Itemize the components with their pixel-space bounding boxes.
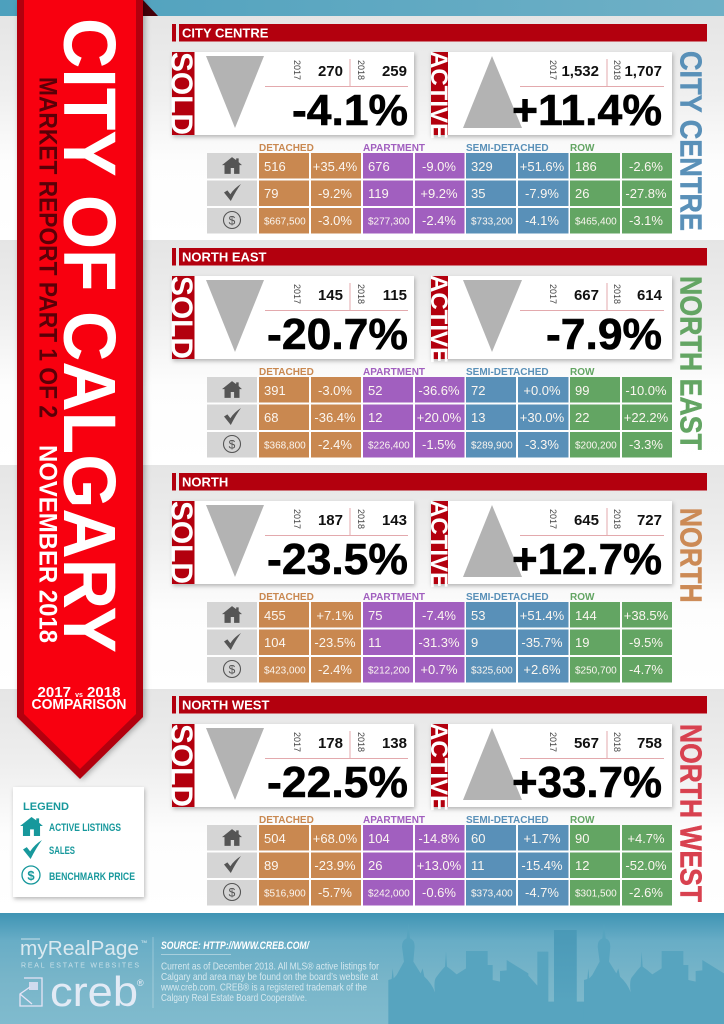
top teal band xyxy=(0,0,724,16)
benchmark price row: $250,700 xyxy=(575,666,617,676)
listings row: +4.7% xyxy=(627,831,665,846)
listings row: 144 xyxy=(575,608,597,623)
panel: active xyxy=(425,275,672,363)
benchmark price row: +0.7% xyxy=(420,662,458,677)
sales row: 79 xyxy=(264,186,278,201)
2017 active xyxy=(548,60,599,80)
benchmark price row xyxy=(264,437,663,452)
panel: active xyxy=(425,500,672,588)
disclaimer: Calgary and area may be found on the board’s website at xyxy=(161,971,378,983)
sales row: 11 xyxy=(368,635,382,650)
listings row: 60 xyxy=(471,831,485,846)
column headings xyxy=(259,367,595,378)
icon: dollar: $ xyxy=(229,438,236,452)
column headings: APARTMENT xyxy=(363,592,425,603)
2017 sold xyxy=(292,509,343,529)
sales row: 9 xyxy=(471,635,478,650)
sold change: -23.5% xyxy=(267,535,408,584)
sales row: 11 xyxy=(471,858,484,873)
listings row xyxy=(264,608,669,623)
2017 active: 2017 xyxy=(548,732,558,752)
benchmark price row: -2.4% xyxy=(422,213,456,228)
logo: myRealPage: myRealPage xyxy=(20,938,139,960)
panel: sold xyxy=(164,276,414,359)
section: north xyxy=(164,473,708,682)
icon: dollar: $ xyxy=(229,662,236,676)
section header xyxy=(172,24,707,42)
sales row: +22.2% xyxy=(624,410,669,425)
benchmark price row: +2.6% xyxy=(523,662,561,677)
disclaimer: Current as of December 2018. All MLS® active listings for xyxy=(161,960,379,972)
benchmark price row: -4.1% xyxy=(525,213,559,228)
sold strip: SOLD xyxy=(164,724,200,807)
icon: dollar: $ xyxy=(229,214,236,228)
up arrow xyxy=(463,505,522,577)
active change: +12.7% xyxy=(512,535,662,584)
main title: CITY OF CALGARY xyxy=(48,18,131,653)
benchmark price row: $242,000 xyxy=(368,888,410,900)
sales row: 19 xyxy=(575,635,589,650)
column headings: SEMI-DETACHED xyxy=(466,367,549,378)
listings row: 516 xyxy=(264,159,286,174)
2018 sold: 143 xyxy=(382,512,407,529)
sales row xyxy=(264,186,667,201)
2018 active: 2018 xyxy=(612,60,622,80)
legend xyxy=(13,787,144,897)
column headings: APARTMENT xyxy=(363,143,425,154)
benchmark price row: -4.7% xyxy=(525,885,559,900)
sold strip: SOLD xyxy=(164,276,200,359)
section header xyxy=(172,696,707,714)
icon: check xyxy=(224,633,241,650)
benchmark price row: $212,200 xyxy=(368,666,410,676)
2018 active: 1,707 xyxy=(624,63,662,80)
red ribbon xyxy=(17,0,158,779)
icon: house xyxy=(222,606,242,623)
2017 sold: 2017 xyxy=(292,284,302,304)
2017 sold: 2017 xyxy=(292,509,302,529)
benchmark price row: $368,800 xyxy=(264,440,306,452)
benchmark price row: -0.6% xyxy=(422,885,456,900)
2017 active: 2017 xyxy=(548,509,558,529)
active strip: ACTIVE xyxy=(425,723,452,811)
section header: NORTH WEST xyxy=(182,698,269,712)
sales row: -9.5% xyxy=(629,635,663,650)
active strip: ACTIVE xyxy=(425,275,452,363)
sales row: 26 xyxy=(575,186,589,201)
sales row: -27.8% xyxy=(625,186,667,201)
listings row: +51.6% xyxy=(520,159,565,174)
down arrow xyxy=(206,56,264,128)
sold change: -4.1% xyxy=(292,86,408,135)
benchmark price row: $277,300 xyxy=(368,216,410,228)
section header xyxy=(172,473,707,490)
2018 sold: 2018 xyxy=(356,60,366,80)
2018 sold: 115 xyxy=(383,287,407,304)
benchmark price row: $516,900 xyxy=(264,888,306,900)
listings row: 72 xyxy=(471,383,485,398)
icon: benchmark price: $ xyxy=(27,868,35,883)
column headings: SEMI-DETACHED xyxy=(466,592,549,603)
listings row: 52 xyxy=(368,383,382,398)
listings row: 99 xyxy=(575,383,589,398)
listings row: +35.4% xyxy=(313,159,358,174)
2017 active: 2017 xyxy=(548,60,558,80)
icon: house xyxy=(222,157,242,174)
sales row: 68 xyxy=(264,410,278,425)
listings row: -36.6% xyxy=(418,383,460,398)
sales row: 119 xyxy=(368,186,389,201)
sales row: -36.4% xyxy=(314,410,356,425)
2017 active: 1,532 xyxy=(561,63,599,80)
2018 active: 727 xyxy=(637,512,662,529)
benchmark price row: $200,200 xyxy=(575,440,617,452)
sold strip: SOLD xyxy=(164,52,200,135)
sold change: -22.5% xyxy=(267,758,408,807)
dividers xyxy=(520,731,664,758)
2018 active: 614 xyxy=(637,287,663,304)
comparison label: 2017 vs 2018 xyxy=(38,684,120,701)
2018 sold xyxy=(356,732,407,752)
sales row xyxy=(264,635,663,650)
column headings: SEMI-DETACHED xyxy=(466,815,549,826)
sales row: +9.2% xyxy=(420,186,458,201)
logo: myRealPage xyxy=(20,938,147,970)
column headings: SEMI-DETACHED xyxy=(466,143,549,154)
property type table xyxy=(207,592,672,682)
2018 active: 2018 xyxy=(612,732,622,752)
column headings: ROW xyxy=(570,367,595,378)
panel: sold xyxy=(164,724,414,807)
creb icon xyxy=(20,978,42,1006)
footer xyxy=(0,913,724,1024)
benchmark price row: -3.3% xyxy=(629,437,663,452)
2017 sold: 178 xyxy=(318,735,343,752)
report date: NOVEMBER 2018 xyxy=(34,445,62,643)
icon: dollar xyxy=(224,436,240,452)
listings row: +51.4% xyxy=(520,608,565,623)
icon: check xyxy=(224,856,241,873)
2018 sold xyxy=(356,284,407,304)
column headings xyxy=(259,143,595,154)
sales row: 89 xyxy=(264,858,278,873)
2017 active: 2017 xyxy=(548,284,558,304)
panel: active xyxy=(425,723,672,811)
2017 sold: 187 xyxy=(318,512,343,529)
label: sales: SALES xyxy=(49,845,75,857)
2018 sold: 138 xyxy=(382,735,407,752)
side label: NORTH EAST xyxy=(674,276,708,450)
listings row: 90 xyxy=(575,831,589,846)
sales row: -7.9% xyxy=(525,186,559,201)
logo: creb xyxy=(20,968,144,1015)
column headings: DETACHED xyxy=(259,367,314,378)
property type table xyxy=(207,815,672,906)
section header: NORTH EAST xyxy=(182,250,267,264)
logo: creb: ® xyxy=(137,978,144,988)
icon: dollar xyxy=(224,212,240,228)
benchmark price row: $301,500 xyxy=(575,888,617,900)
sales row: 26 xyxy=(368,858,382,873)
side label: CITY CENTRE xyxy=(674,51,708,231)
column headings xyxy=(259,592,595,603)
2018 active xyxy=(612,60,662,80)
benchmark price row: $373,400 xyxy=(471,888,513,900)
section: city centre xyxy=(164,24,708,234)
down arrow xyxy=(463,280,522,352)
logo: myRealPage: REAL ESTATE WEBSITES xyxy=(21,962,139,970)
benchmark price row: -3.3% xyxy=(525,437,559,452)
icon: house xyxy=(222,829,242,846)
sales row: -15.4% xyxy=(521,858,563,873)
section: north west xyxy=(164,696,708,906)
side label: NORTH xyxy=(674,508,708,603)
ribbon inner xyxy=(24,0,136,769)
benchmark price row xyxy=(264,885,663,900)
benchmark price row: -1.5% xyxy=(422,437,456,452)
section header: CITY CENTRE xyxy=(182,26,269,40)
panel: sold xyxy=(164,501,414,584)
disclaimer: www.creb.com. CREB® is a registered trademark of the xyxy=(160,982,367,994)
icon: check xyxy=(224,408,241,425)
2017 sold xyxy=(292,284,343,304)
dividers xyxy=(520,283,664,310)
column headings: APARTMENT xyxy=(363,815,425,826)
benchmark price row: $325,600 xyxy=(471,666,513,676)
dividers xyxy=(265,59,408,86)
sales row: +30.0% xyxy=(520,410,565,425)
benchmark price row: -3.0% xyxy=(318,213,352,228)
2017 active: 645 xyxy=(574,512,599,529)
dividers xyxy=(520,59,664,86)
sales row: -31.3% xyxy=(418,635,460,650)
2018 active xyxy=(612,284,663,304)
benchmark price row xyxy=(264,213,663,228)
listings row: 504 xyxy=(264,831,286,846)
active strip: ACTIVE xyxy=(425,51,452,139)
sales row: 22 xyxy=(575,410,589,425)
listings row: +68.0% xyxy=(313,831,358,846)
listings row: 455 xyxy=(264,608,286,623)
benchmark price row: $423,000 xyxy=(264,666,306,676)
icon: sales xyxy=(23,840,42,859)
legend title: LEGEND xyxy=(23,801,69,813)
column headings: DETACHED xyxy=(259,592,314,603)
2018 sold: 2018 xyxy=(356,732,366,752)
listings row: +1.7% xyxy=(523,831,561,846)
panel: active xyxy=(425,51,672,139)
listings row: 186 xyxy=(575,159,597,174)
skyline xyxy=(388,923,724,1024)
2017 sold: 2017 xyxy=(292,60,302,80)
column headings: APARTMENT xyxy=(363,367,425,378)
creb wordmark: creb xyxy=(50,968,138,1015)
down arrow xyxy=(206,505,264,577)
sales row: +13.0% xyxy=(417,858,462,873)
label: benchmark price: BENCHMARK PRICE xyxy=(49,871,135,883)
panel: sold xyxy=(164,52,414,135)
2017 active xyxy=(548,284,599,304)
property type table xyxy=(207,367,672,458)
sales row: -35.7% xyxy=(521,635,563,650)
sales row: -52.0% xyxy=(625,858,667,873)
sales row: -9.2% xyxy=(318,186,352,201)
sales row xyxy=(264,410,669,425)
listings row: +0.0% xyxy=(523,383,561,398)
disclaimer xyxy=(160,960,379,1004)
listings row xyxy=(264,831,665,846)
2018 active: 2018 xyxy=(612,284,622,304)
2018 active: 2018 xyxy=(612,509,622,529)
column headings: ROW xyxy=(570,143,595,154)
listings row: 53 xyxy=(471,608,485,623)
sales row: 104 xyxy=(264,635,286,650)
icon: check xyxy=(224,184,241,201)
active change: -7.9% xyxy=(546,310,662,359)
active strip: ACTIVE xyxy=(425,500,452,588)
benchmark price row: $465,400 xyxy=(575,216,617,228)
listings row: -10.0% xyxy=(625,383,667,398)
benchmark price row: $667,500 xyxy=(264,216,306,228)
disclaimer: Calgary Real Estate Board Cooperative. xyxy=(161,992,307,1004)
2018 active xyxy=(612,732,662,752)
benchmark price row: $226,400 xyxy=(368,440,410,452)
2018 sold xyxy=(356,60,407,80)
listings row: 329 xyxy=(471,159,493,174)
column headings: DETACHED xyxy=(259,815,314,826)
sold change: -20.7% xyxy=(267,310,408,359)
2018 active xyxy=(612,509,662,529)
active change: +33.7% xyxy=(512,758,662,807)
listings row: 391 xyxy=(264,383,286,398)
listings row xyxy=(264,383,667,398)
icon: dollar: $ xyxy=(229,886,236,900)
2018 sold xyxy=(356,509,407,529)
dividers xyxy=(265,283,408,310)
sales row: -23.9% xyxy=(314,858,356,873)
column headings xyxy=(259,815,595,826)
sales row: +20.0% xyxy=(417,410,462,425)
column headings: DETACHED xyxy=(259,143,314,154)
benchmark price row: -4.7% xyxy=(629,662,663,677)
2017 sold: 2017 xyxy=(292,732,302,752)
up arrow xyxy=(463,728,522,800)
icon: active listings xyxy=(20,817,43,836)
sales row: 13 xyxy=(471,410,485,425)
listings row xyxy=(264,159,663,174)
comparison label: COMPARISON xyxy=(32,696,126,713)
ribbon fold xyxy=(143,0,158,16)
property type table xyxy=(207,143,672,234)
column headings: ROW xyxy=(570,592,595,603)
benchmark price row xyxy=(264,662,663,677)
benchmark price row: -2.4% xyxy=(318,437,352,452)
2017 sold: 270 xyxy=(318,63,343,80)
section header: NORTH xyxy=(182,474,228,490)
listings row: -14.8% xyxy=(418,831,460,846)
dividers xyxy=(265,731,408,758)
down arrow xyxy=(206,728,264,800)
sales row: 12 xyxy=(368,410,382,425)
2018 active: 758 xyxy=(637,735,662,752)
2017 active xyxy=(548,509,599,529)
listings row: +7.1% xyxy=(316,608,354,623)
listings row: -3.0% xyxy=(318,383,352,398)
benchmark price row: -3.1% xyxy=(629,213,663,228)
icon: dollar xyxy=(224,884,240,900)
side label: NORTH WEST xyxy=(674,724,708,902)
2017 sold xyxy=(292,60,343,80)
dividers xyxy=(265,508,408,536)
up arrow xyxy=(463,56,522,128)
2018 sold: 2018 xyxy=(356,509,366,529)
2017 sold xyxy=(292,732,343,752)
benchmark price row: $289,900 xyxy=(471,440,513,452)
logo: myRealPage: TM xyxy=(141,939,147,944)
subtitle: MARKET REPORT PART 1 OF 2 xyxy=(34,77,62,418)
listings row: 75 xyxy=(368,608,382,623)
benchmark price row: $733,200 xyxy=(471,216,513,228)
listings row: 104 xyxy=(368,831,390,846)
sales row: 12 xyxy=(575,858,589,873)
label: active listings: ACTIVE LISTINGS xyxy=(49,822,121,834)
2017 active xyxy=(548,732,599,752)
ribbon body xyxy=(17,0,143,779)
section header xyxy=(172,248,707,266)
sales row: -23.5% xyxy=(314,635,356,650)
listings row: -7.4% xyxy=(422,608,456,623)
comparison label xyxy=(32,684,126,713)
benchmark price row: -2.4% xyxy=(318,662,352,677)
listings row: +38.5% xyxy=(624,608,669,623)
source line: SOURCE: HTTP://WWW.CREB.COM/ xyxy=(161,940,311,952)
icon: dollar xyxy=(224,660,240,678)
active change: +11.4% xyxy=(512,86,662,135)
dividers xyxy=(520,508,664,536)
down arrow xyxy=(206,280,264,352)
listings row: -9.0% xyxy=(422,159,456,174)
2017 sold: 145 xyxy=(318,287,343,304)
listings row: 676 xyxy=(368,159,390,174)
listings row: -2.6% xyxy=(629,159,663,174)
column headings: ROW xyxy=(570,815,595,826)
icon: house xyxy=(222,381,242,398)
section: north east xyxy=(164,248,708,458)
sales row xyxy=(264,858,667,873)
sold strip: SOLD xyxy=(164,501,200,584)
sales row: 35 xyxy=(471,186,485,201)
benchmark price row: -2.6% xyxy=(629,885,663,900)
2018 sold: 2018 xyxy=(356,284,366,304)
2017 active: 567 xyxy=(574,735,599,752)
2017 active: 667 xyxy=(574,287,599,304)
2018 sold: 259 xyxy=(382,63,407,80)
benchmark price row: -5.7% xyxy=(318,885,352,900)
